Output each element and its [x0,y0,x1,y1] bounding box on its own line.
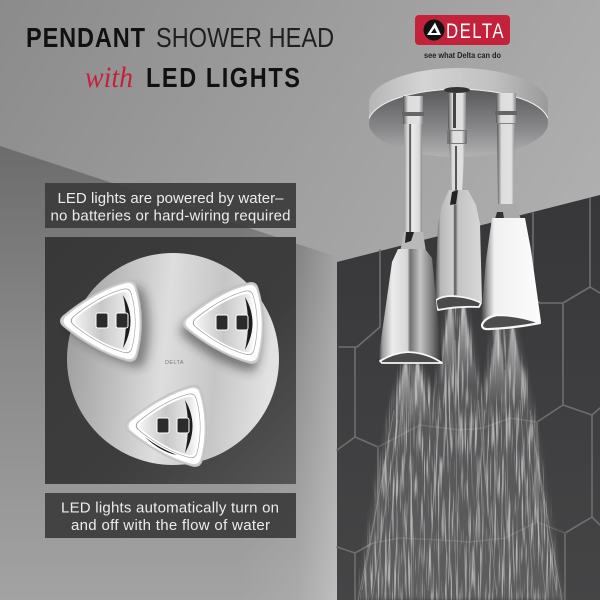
shower head: right [481,204,541,329]
panel: LED close-up [45,237,296,484]
shower head: middle [435,190,482,310]
title [26,23,334,94]
water spray [357,308,564,600]
shower plate disc [67,253,279,465]
title: with: with [85,61,133,94]
plate brand mark: DELTA [165,360,184,366]
nozzle rim [482,315,540,329]
shower head: left [378,232,442,363]
callout: powered by water: no batteries or hard-wiring required [50,208,290,224]
callout: powered by water: LED lights are powered by water– [58,190,284,207]
LED head: right [180,283,263,371]
title: line one bold: PENDANT [26,23,145,53]
nozzle rim [380,352,442,363]
shower canopy [369,68,548,157]
logo tagline: see what Delta can do [424,50,501,60]
callout: automatic on and off: LED lights automatically turn on [61,500,279,516]
logo wordmark: DELTA [446,20,504,44]
title: line two bold: LED LIGHTS [146,63,300,93]
nozzle rim [436,296,481,310]
icon: Delta mark [424,20,444,40]
callout: automatic on and off: and off with the flow of water [71,517,270,534]
arm: middle [444,87,470,192]
Delta logo [415,15,510,60]
LED head: bottom [126,386,206,466]
title: line one light: SHOWER HEAD [156,23,334,53]
callout: powered by water [45,183,296,228]
arm: left [402,96,424,234]
callout: automatic on and off [45,493,296,538]
arm: right [495,93,517,206]
background: side wall [0,146,337,600]
background: wall corner highlight [240,225,337,600]
background: tile wall [337,195,600,600]
LED head: left [60,281,149,367]
